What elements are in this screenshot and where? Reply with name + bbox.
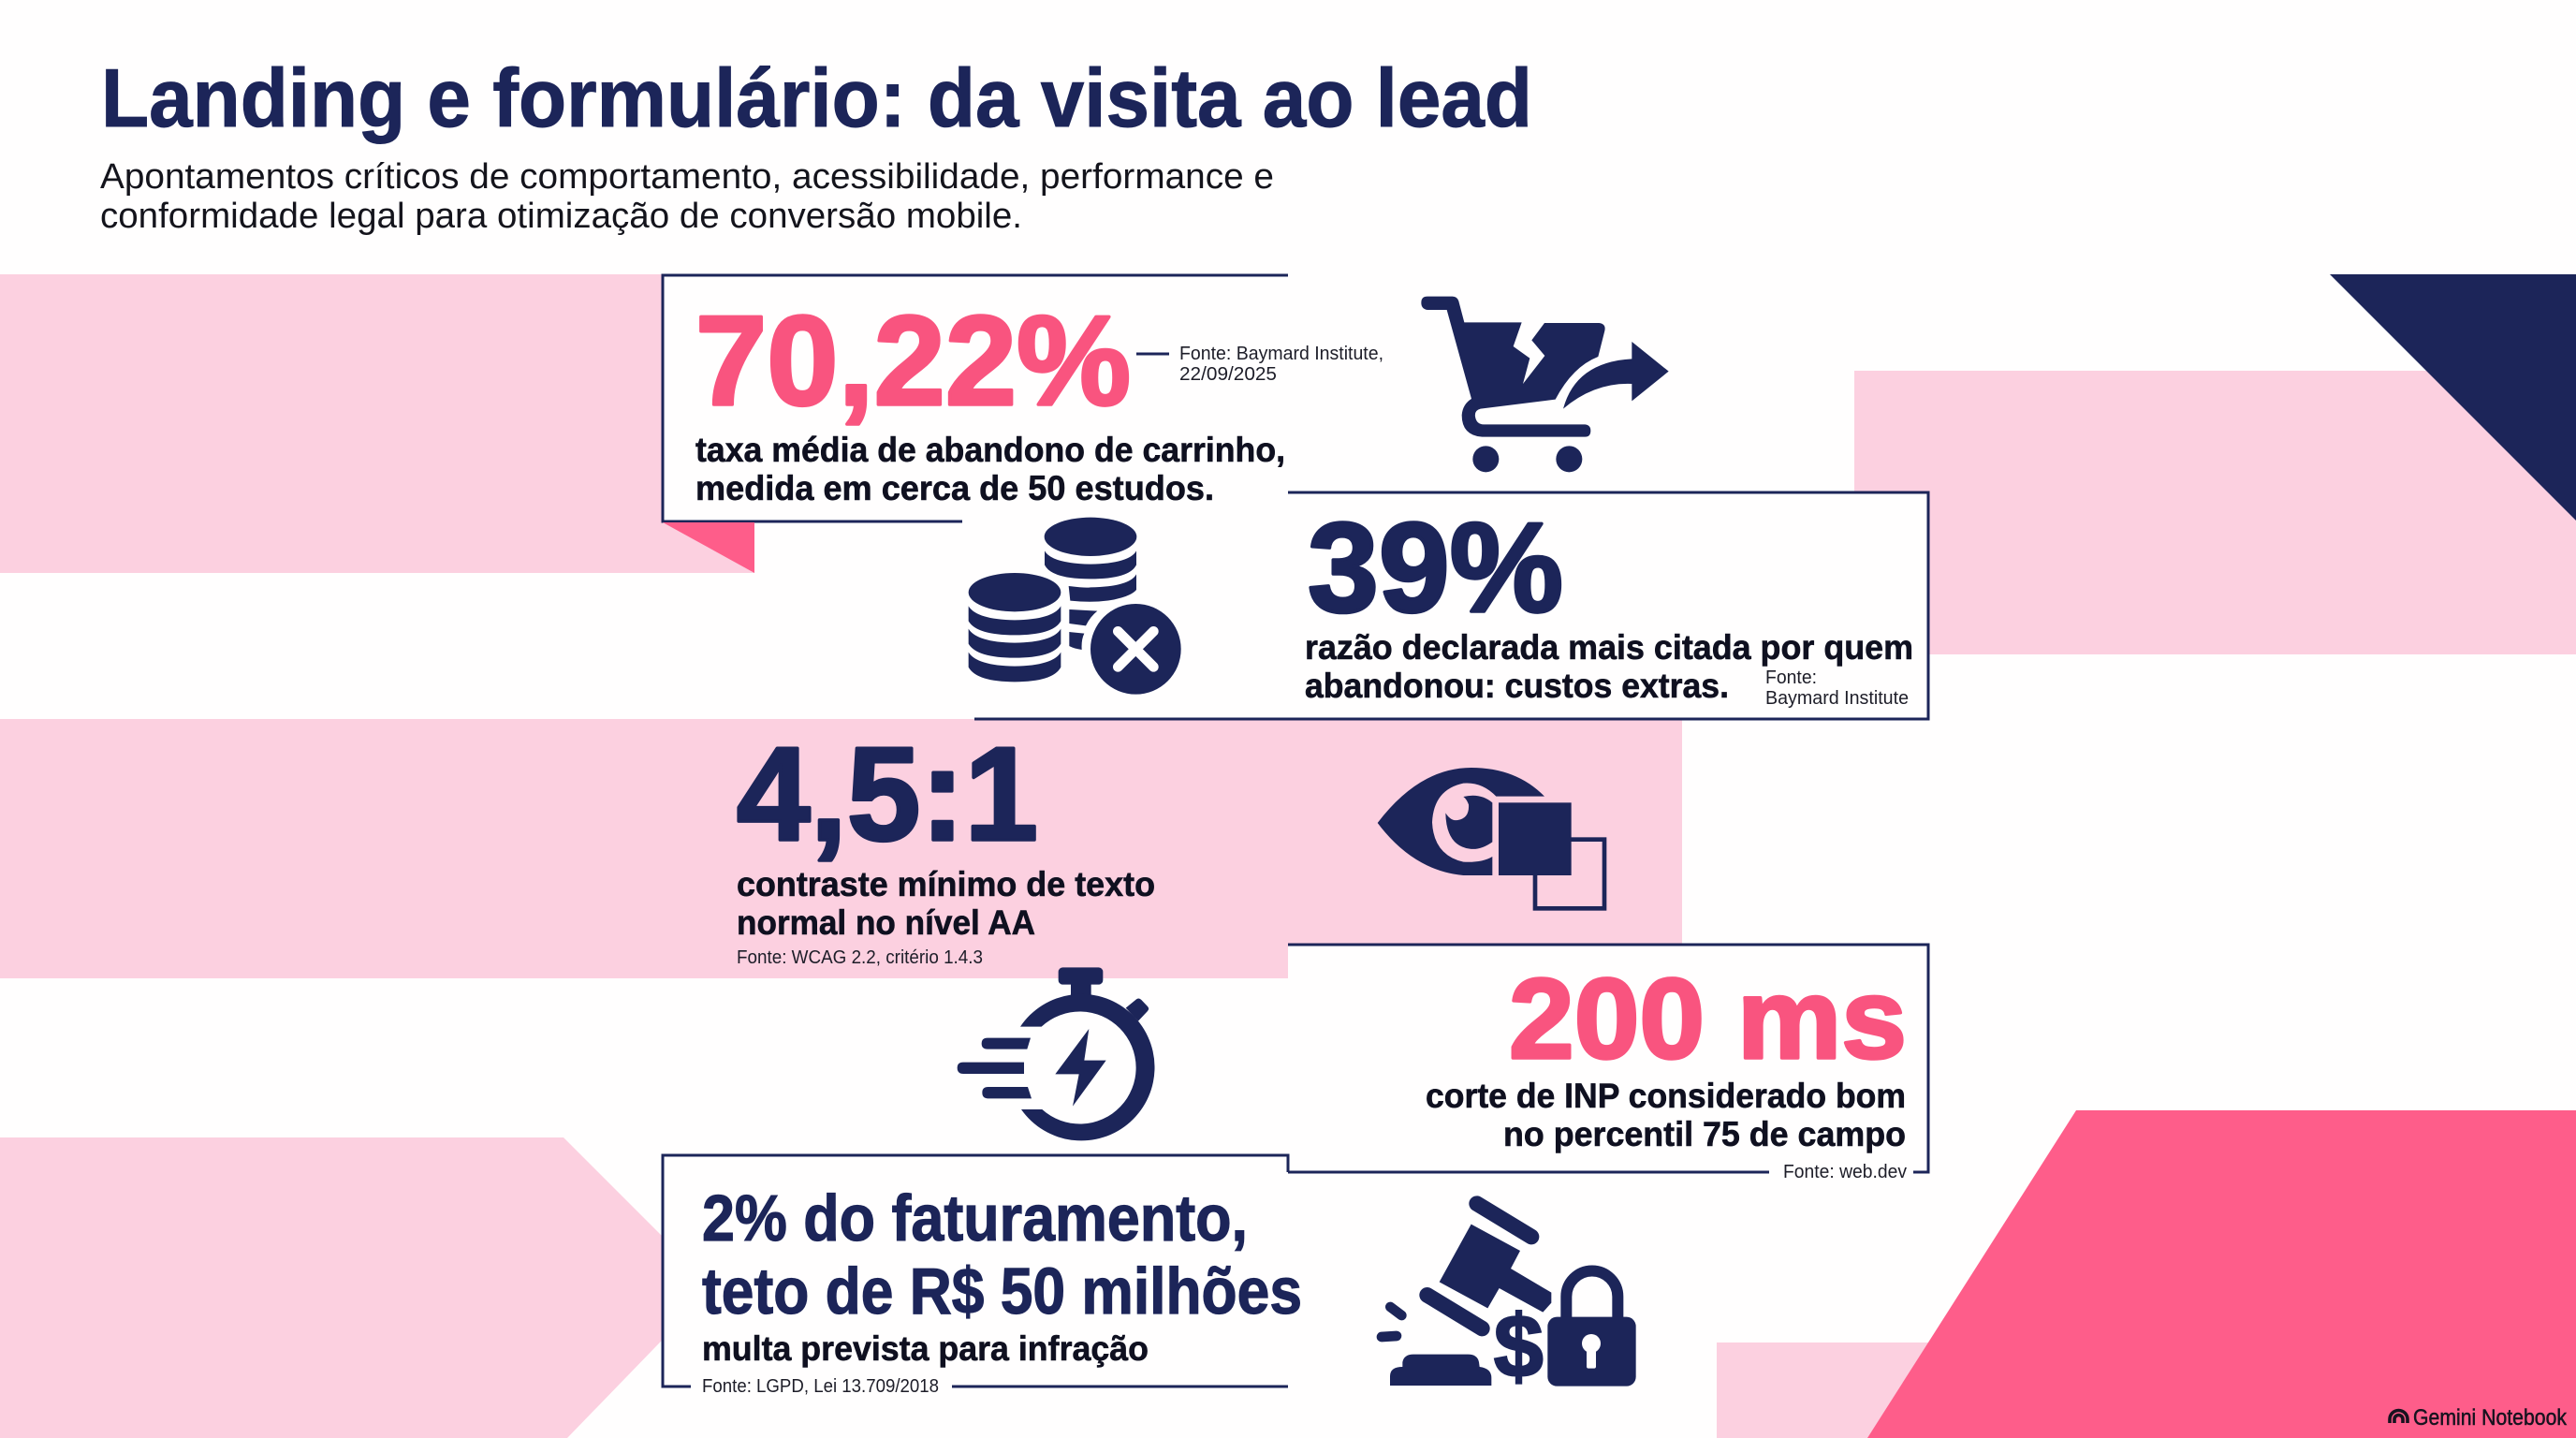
subtitle: Apontamentos críticos de comportamento, acessibilidade, performance e — [100, 157, 1274, 197]
title: Landing e formulário: da visita ao lead — [101, 51, 1532, 144]
headline: 2% do faturamento, — [702, 1181, 1248, 1255]
subtitle — [100, 157, 1274, 236]
description — [695, 431, 1285, 507]
source: Fonte: web.dev — [1783, 1162, 1907, 1182]
description — [1426, 1077, 1906, 1153]
source — [1136, 344, 1383, 385]
description: taxa média de abandono de carrinho, — [695, 431, 1285, 469]
icon: eye with contrast squares — [1378, 768, 1604, 908]
source: Fonte: WCAG 2.2, critério 1.4.3 — [737, 947, 983, 968]
stat: 70,22%: 70,22% — [695, 289, 1131, 432]
panel: contrast — [737, 720, 1155, 968]
panel: LGPD fine — [663, 1155, 1302, 1397]
panel: cart abandonment — [663, 275, 1383, 573]
icon: coins with cross — [969, 518, 1181, 695]
source — [1765, 668, 1909, 709]
stat: 200 ms: 200 ms — [1509, 955, 1907, 1082]
description: corte de INP considerado bom — [1426, 1077, 1906, 1115]
icon: gavel, dollar and padlock — [1382, 1204, 1636, 1396]
source: Fonte: Baymard Institute, — [1179, 344, 1383, 364]
description — [737, 865, 1155, 942]
icon: stopwatch with bolt — [958, 967, 1155, 1140]
source: 22/09/2025 — [1179, 364, 1277, 385]
panel: extra costs — [974, 492, 1928, 719]
stat: 4,5:1: 4,5:1 — [737, 720, 1038, 869]
description: contraste mínimo de texto — [737, 865, 1155, 903]
description: medida em cerca de 50 estudos. — [695, 469, 1214, 507]
description: normal no nível AA — [737, 903, 1035, 942]
description: no percentil 75 de campo — [1503, 1115, 1906, 1153]
subtitle: conformidade legal para otimização de conversão mobile. — [100, 197, 1022, 236]
icon: gavel, dollar and padlock: $ — [1494, 1297, 1544, 1396]
stat: 39%: 39% — [1308, 496, 1563, 638]
source: Fonte: — [1765, 668, 1817, 688]
source: Baymard Institute — [1765, 688, 1909, 709]
description — [1305, 628, 1913, 705]
icon: broken cart with arrow — [1421, 297, 1669, 472]
description: razão declarada mais citada por quem — [1305, 628, 1913, 667]
description: abandonou: custos extras. — [1305, 667, 1729, 705]
description: multa prevista para infração — [702, 1329, 1149, 1368]
headline — [702, 1181, 1302, 1328]
panel: INP — [1288, 945, 1928, 1182]
headline: teto de R$ 50 milhões — [702, 1255, 1302, 1328]
source: Fonte: LGPD, Lei 13.709/2018 — [702, 1376, 939, 1397]
